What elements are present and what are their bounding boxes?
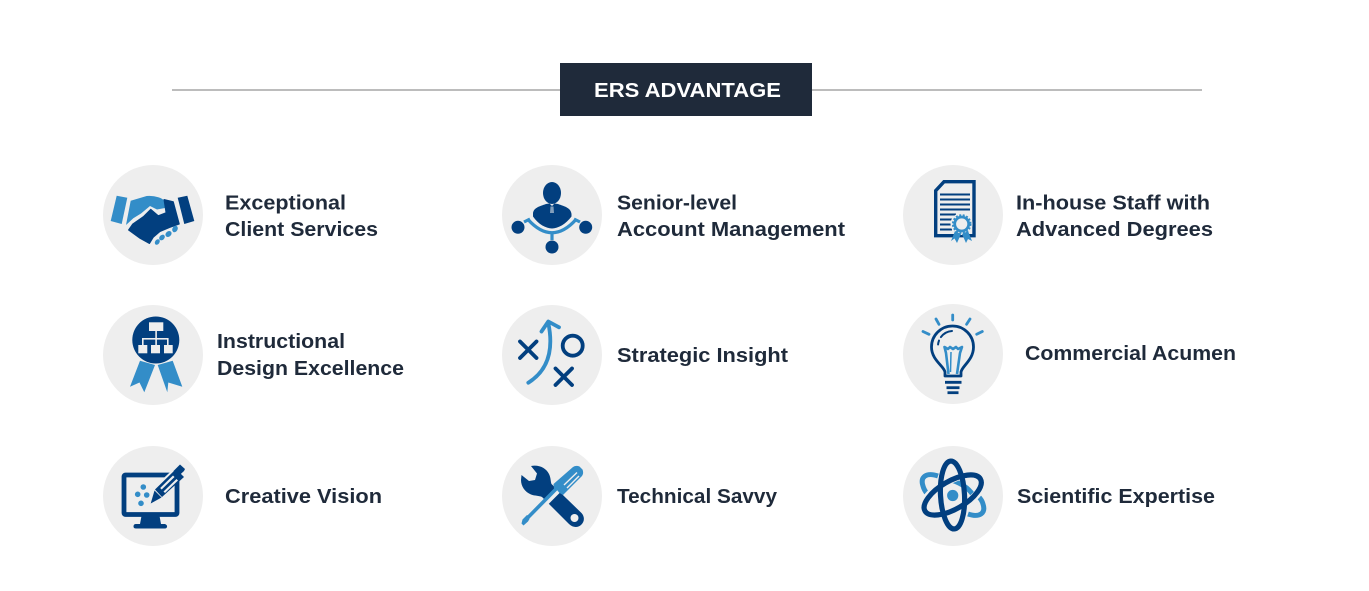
item: Technical Savvy — [502, 446, 778, 546]
icon: light bulb — [923, 315, 982, 393]
heading: ERS Advantage: ERS ADVANTAGE — [594, 79, 781, 102]
label: Strategic Insight — [617, 344, 788, 367]
label: Account Management — [617, 218, 845, 241]
item: Exceptional Client Services — [103, 165, 378, 265]
label — [217, 330, 404, 380]
item: Creative Vision — [103, 446, 382, 546]
label: Advanced Degrees — [1016, 218, 1213, 241]
item: Instructional Design Excellence — [103, 305, 404, 405]
label — [1016, 192, 1213, 241]
label: Instructional — [217, 330, 345, 353]
icon: manager with network — [512, 182, 592, 254]
item: Senior-level Account Management — [502, 165, 845, 265]
label: Design Excellence — [217, 357, 404, 380]
heading: ERS Advantage — [560, 63, 812, 116]
icon: award ribbon with org chart — [130, 316, 182, 392]
label: Exceptional — [225, 192, 346, 214]
icon: play diagram — [520, 322, 583, 385]
label — [225, 192, 378, 241]
item: In-house Staff with Advanced Degrees — [903, 165, 1213, 265]
label: In-house Staff with — [1016, 192, 1210, 214]
label: Scientific Expertise — [1017, 485, 1215, 508]
item: Scientific Expertise — [903, 446, 1215, 546]
item: Strategic Insight — [502, 305, 788, 405]
icon: atom — [915, 460, 990, 530]
label: Creative Vision — [225, 485, 382, 508]
icon: wrench and screwdriver — [521, 466, 584, 527]
icon: handshake — [111, 196, 194, 246]
icon: certificate document — [936, 182, 974, 243]
label: Commercial Acumen — [1025, 342, 1236, 365]
label: Technical Savvy — [617, 485, 778, 508]
item: Commercial Acumen — [903, 304, 1236, 404]
label: Client Services — [225, 218, 378, 241]
icon: monitor with pencil — [124, 462, 187, 528]
label — [617, 192, 845, 241]
label: Senior-level — [617, 192, 737, 214]
